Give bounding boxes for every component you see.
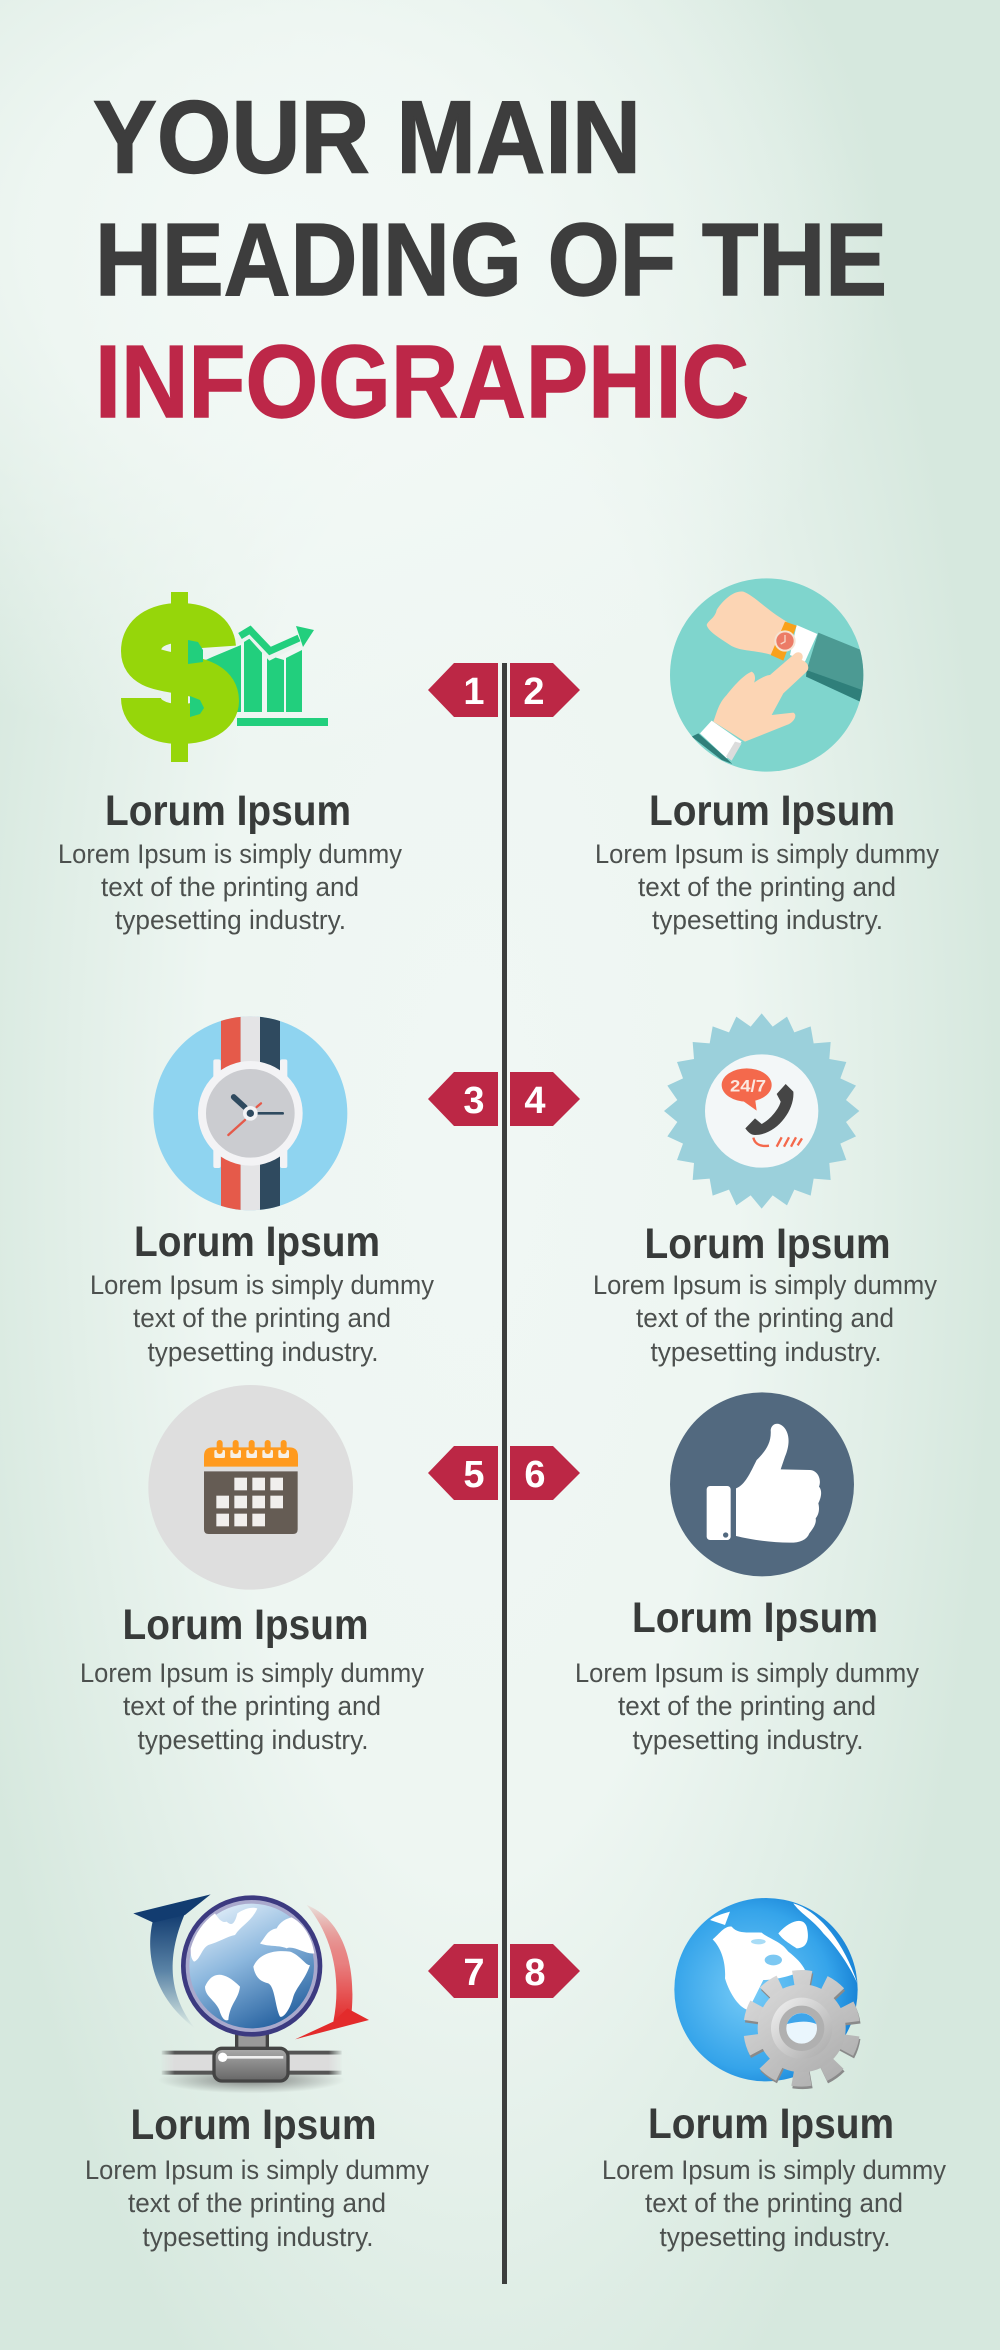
text block 1: text of the printing and bbox=[101, 872, 359, 902]
text block 2: typesetting industry. bbox=[652, 905, 883, 935]
number badge 6: 6 bbox=[524, 1454, 546, 1496]
number badge 5 bbox=[428, 1446, 498, 1500]
text block 2: text of the printing and bbox=[638, 872, 896, 902]
text block 8: typesetting industry. bbox=[660, 2222, 890, 2252]
text block 3: Lorum Ipsum bbox=[134, 1218, 380, 1266]
number badge 1 bbox=[428, 663, 498, 717]
icon: wristwatch bbox=[153, 1013, 347, 1213]
text block 1: Lorem Ipsum is simply dummy bbox=[58, 839, 402, 869]
icon: 24/7 phone support badge bbox=[664, 1013, 859, 1209]
title bbox=[93, 80, 887, 439]
text block 1 bbox=[58, 787, 402, 935]
text block 4: text of the printing and bbox=[636, 1303, 894, 1333]
number badge 8: 8 bbox=[524, 1952, 546, 1994]
text block 1: typesetting industry. bbox=[115, 905, 346, 935]
icon: 24/7 phone support badge: 24/7 bbox=[730, 1077, 766, 1096]
text block 7 bbox=[85, 2101, 429, 2252]
number badge 6 bbox=[510, 1446, 580, 1500]
icon: globe with gear bbox=[674, 1898, 859, 2087]
number badge 7: 7 bbox=[463, 1952, 485, 1994]
text block 6: text of the printing and bbox=[618, 1691, 876, 1721]
icon: dollar sign with growth chart bbox=[141, 592, 328, 762]
text block 2: Lorem Ipsum is simply dummy bbox=[595, 839, 939, 869]
text block 7: Lorem Ipsum is simply dummy bbox=[85, 2155, 429, 2185]
title: INFOGRAPHIC bbox=[95, 324, 749, 439]
icon: network globe with arrows bbox=[133, 1894, 369, 2093]
text block 5 bbox=[80, 1601, 424, 1755]
text block 3: text of the printing and bbox=[133, 1303, 391, 1333]
text block 8: Lorum Ipsum bbox=[648, 2100, 894, 2148]
number badge 2: 2 bbox=[523, 671, 545, 713]
number badge 1: 1 bbox=[463, 671, 485, 713]
number badge 4: 4 bbox=[524, 1080, 546, 1122]
text block 6: Lorum Ipsum bbox=[632, 1594, 878, 1642]
number badge 2 bbox=[510, 663, 580, 717]
text block 1: Lorum Ipsum bbox=[105, 787, 351, 835]
text block 6 bbox=[575, 1594, 919, 1755]
text block 4: typesetting industry. bbox=[650, 1337, 882, 1367]
number badge 7 bbox=[428, 1944, 498, 1998]
text block 7: typesetting industry. bbox=[142, 2222, 374, 2252]
icon: thumbs up bbox=[670, 1392, 854, 1576]
title: HEADING OF THE bbox=[95, 202, 887, 317]
text block 7: text of the printing and bbox=[128, 2188, 386, 2218]
text block 6: Lorem Ipsum is simply dummy bbox=[575, 1658, 919, 1688]
text block 5: typesetting industry. bbox=[138, 1725, 368, 1755]
text block 7: Lorum Ipsum bbox=[130, 2101, 376, 2149]
text block 5: Lorem Ipsum is simply dummy bbox=[80, 1658, 424, 1688]
text block 4: Lorem Ipsum is simply dummy bbox=[593, 1270, 937, 1300]
text block 8: text of the printing and bbox=[645, 2188, 903, 2218]
number badge 8 bbox=[510, 1944, 580, 1998]
number badge 3: 3 bbox=[463, 1080, 485, 1122]
number badge 3 bbox=[428, 1072, 498, 1126]
central timeline line bbox=[502, 663, 507, 2284]
text block 4 bbox=[593, 1220, 937, 1367]
text block 3: Lorem Ipsum is simply dummy bbox=[90, 1270, 434, 1300]
text block 4: Lorum Ipsum bbox=[644, 1220, 890, 1268]
text block 2 bbox=[595, 787, 939, 935]
text block 5: text of the printing and bbox=[123, 1691, 381, 1721]
icon: hands pointing at wristwatch bbox=[670, 578, 865, 772]
number badge 5: 5 bbox=[463, 1454, 485, 1496]
number badge 4 bbox=[510, 1072, 580, 1126]
text block 8: Lorem Ipsum is simply dummy bbox=[602, 2155, 946, 2185]
text block 3 bbox=[90, 1218, 434, 1367]
text block 8 bbox=[602, 2100, 946, 2252]
title: YOUR MAIN bbox=[93, 80, 641, 194]
text block 6: typesetting industry. bbox=[632, 1725, 864, 1755]
text block 2: Lorum Ipsum bbox=[649, 787, 895, 835]
text block 3: typesetting industry. bbox=[148, 1337, 378, 1367]
icon: calendar bbox=[148, 1385, 353, 1590]
text block 5: Lorum Ipsum bbox=[122, 1601, 368, 1649]
